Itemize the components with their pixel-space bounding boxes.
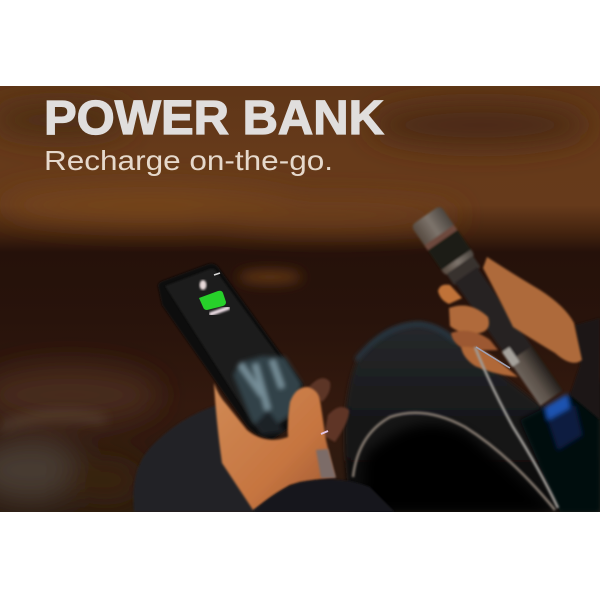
left hand xyxy=(214,383,335,510)
button glint xyxy=(321,431,328,434)
infographic canvas xyxy=(0,86,600,512)
title: POWER BANK xyxy=(44,92,384,145)
flashlight xyxy=(411,205,567,408)
switch xyxy=(502,347,520,367)
tail xyxy=(510,346,563,406)
dark jacket sleeve xyxy=(253,479,395,512)
jeans: right knee xyxy=(342,320,561,512)
blue sleeve xyxy=(520,380,600,512)
right hand finger behind xyxy=(438,285,462,304)
body xyxy=(456,268,532,358)
green battery xyxy=(199,291,226,310)
head xyxy=(411,205,476,277)
neck xyxy=(446,256,481,285)
watch band xyxy=(316,449,336,478)
cable from flashlight xyxy=(475,347,558,508)
wallpaper xyxy=(233,356,302,435)
dark sleeve right arm xyxy=(570,318,600,420)
copper ring xyxy=(424,225,457,250)
jeans: left knee xyxy=(133,405,262,512)
dark ring xyxy=(427,228,471,270)
blurred ground background xyxy=(0,86,600,512)
charge label xyxy=(211,308,228,314)
status mark xyxy=(214,273,220,275)
subtitle: Recharge on-the-go. xyxy=(44,145,333,176)
phone screen xyxy=(166,269,287,420)
right hand xyxy=(449,257,582,377)
phone xyxy=(158,264,303,440)
photo panel xyxy=(0,86,600,512)
cable to phone xyxy=(353,413,555,510)
phone back fingers xyxy=(308,378,349,442)
charging glyph xyxy=(200,280,206,290)
